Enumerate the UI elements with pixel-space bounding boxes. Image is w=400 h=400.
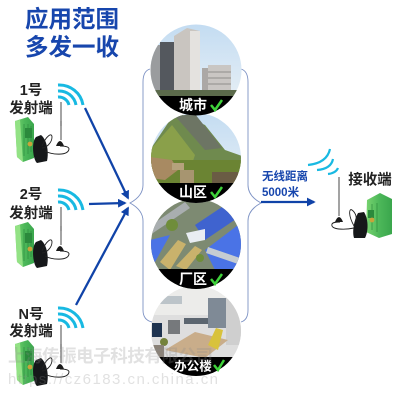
watermark: https://cz6183.cn.china.cn bbox=[8, 371, 218, 388]
label: transmitter 2 bbox=[9, 186, 53, 222]
label band: city bbox=[158, 96, 234, 116]
label band: factory bbox=[158, 269, 234, 289]
icon: transmitter 1 device and signal bbox=[15, 85, 83, 163]
icon: transmitter 2 device and signal bbox=[15, 190, 83, 268]
label: transmitter N: 发射端 bbox=[9, 322, 53, 340]
label: factory: 厂区 bbox=[179, 271, 207, 287]
label: wireless distance bbox=[262, 169, 308, 199]
label: wireless distance: 无线距离 bbox=[262, 169, 308, 183]
label band: mountain bbox=[158, 183, 234, 203]
label: mountain: 山区 bbox=[179, 184, 207, 200]
icon: check factory bbox=[211, 274, 222, 284]
label: receiver: 接收端 bbox=[348, 172, 392, 188]
icon: transmitter N device and signal bbox=[15, 308, 83, 386]
label: city: 城市 bbox=[179, 97, 207, 113]
watermark bbox=[8, 346, 218, 388]
label band: office bbox=[159, 357, 233, 376]
transmitter 1 bbox=[9, 82, 83, 163]
icon: receiver signal bbox=[308, 149, 338, 174]
icon: check mountain bbox=[211, 187, 222, 197]
label: transmitter 1: 发射端 bbox=[9, 99, 53, 117]
arrow to receiver bbox=[261, 201, 314, 203]
label: transmitter 1: 1号 bbox=[20, 82, 42, 99]
label: office: 办公楼 bbox=[174, 358, 212, 374]
label: transmitter 1 bbox=[9, 82, 53, 117]
circle: city bbox=[150, 24, 242, 118]
icon: receiver device bbox=[332, 177, 392, 238]
circle: mountain bbox=[150, 112, 242, 205]
arrows to hub bbox=[76, 108, 128, 305]
label: transmitter N: N号 bbox=[19, 306, 43, 323]
label: transmitter 2: 2号 bbox=[20, 186, 42, 203]
title bbox=[25, 6, 119, 60]
circle: factory bbox=[150, 198, 242, 291]
left bracket bbox=[130, 69, 152, 322]
title: 多发一收 bbox=[25, 34, 119, 60]
watermark: 上海传振电子科技有限公司 bbox=[8, 346, 213, 366]
circle: office bbox=[150, 285, 242, 379]
title: 应用范围 bbox=[25, 6, 119, 32]
label: transmitter N bbox=[9, 306, 53, 340]
icon: check city bbox=[211, 100, 222, 110]
right bracket bbox=[241, 69, 261, 322]
icon: check office bbox=[214, 360, 224, 370]
transmitter 2 bbox=[9, 186, 83, 268]
label: transmitter 2: 发射端 bbox=[9, 204, 53, 222]
label: wireless distance: 5000米 bbox=[262, 185, 300, 199]
transmitter N bbox=[9, 306, 83, 386]
